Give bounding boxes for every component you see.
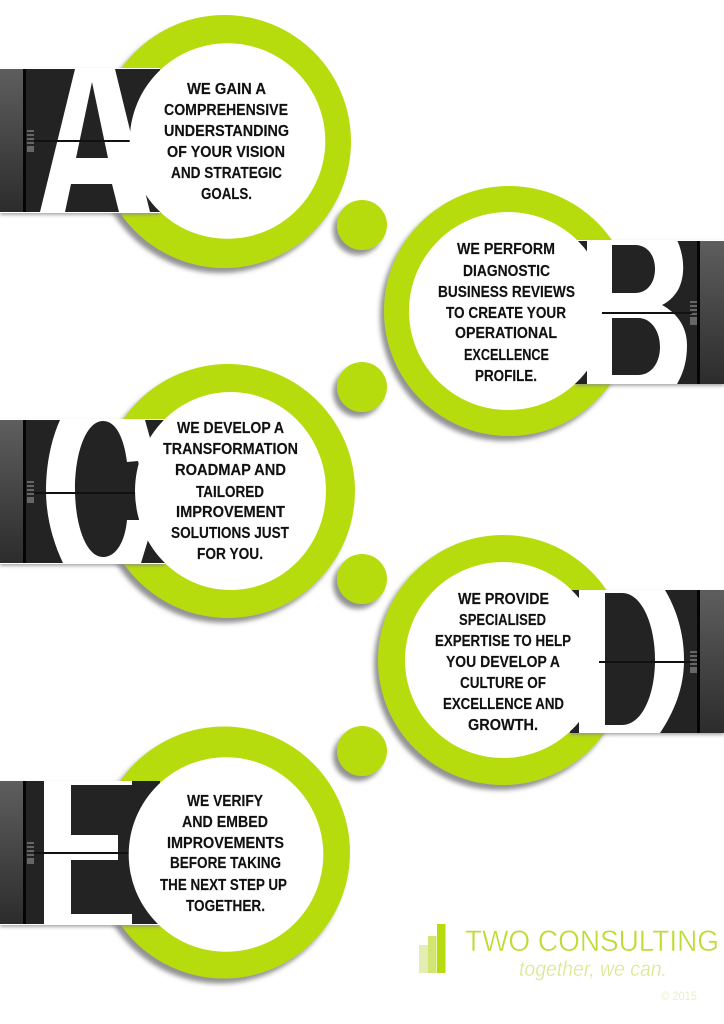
text D: WE PROVIDE [458, 591, 549, 608]
text C: ROADMAP AND [175, 462, 286, 479]
letter block D [570, 590, 724, 733]
text B: TO CREATE YOUR [446, 305, 566, 322]
connector dot 2 [337, 362, 387, 412]
panel: step E [0, 726, 350, 978]
inner circle B [409, 212, 607, 410]
ring C [101, 364, 355, 618]
text D: EXCELLENCE AND [443, 696, 564, 713]
text A: WE GAIN A [187, 81, 266, 98]
text B [438, 241, 575, 385]
logo: Two Consulting [419, 924, 719, 1003]
connector dot 1 [337, 200, 387, 250]
text C: FOR YOU. [197, 546, 263, 563]
text D: SPECIALISED [459, 612, 546, 629]
inner circle E [129, 757, 323, 952]
letter crossbar line B [602, 312, 692, 314]
inner circle D [405, 562, 601, 758]
text C: TAILORED [196, 484, 264, 501]
text D: CULTURE OF [460, 675, 546, 692]
text A: UNDERSTANDING [164, 123, 289, 140]
text E: AND EMBED [182, 814, 268, 831]
text A: COMPREHENSIVE [164, 102, 288, 119]
text B: WE PERFORM [457, 241, 555, 258]
text A [164, 81, 289, 203]
copyright: © 2015 [661, 991, 697, 1003]
letter block B [575, 240, 724, 384]
panel: step D [378, 535, 724, 785]
icon: bar chart logo [419, 924, 446, 973]
text E: THE NEXT STEP UP [160, 877, 287, 894]
text E: BEFORE TAKING [170, 855, 281, 872]
text D: YOU DEVELOP A [446, 654, 560, 671]
text C: IMPROVEMENT [176, 504, 285, 521]
text C [163, 420, 298, 563]
connector dot 3 [337, 554, 387, 604]
inner circle C [135, 392, 326, 590]
text B: BUSINESS REVIEWS [438, 284, 575, 301]
tagline: together, we can. [519, 958, 667, 981]
text E: TOGETHER. [186, 898, 265, 915]
text B: DIAGNOSTIC [463, 263, 550, 280]
panel: step B [384, 186, 724, 436]
text B: PROFILE. [475, 368, 537, 385]
text C: TRANSFORMATION [163, 441, 298, 458]
letter block A [0, 68, 160, 213]
panel: step C [0, 364, 355, 618]
text A: GOALS. [201, 186, 252, 203]
ring A [98, 15, 351, 268]
panel: step A [0, 15, 351, 268]
letter block E [0, 781, 160, 925]
letter block C [0, 419, 165, 564]
text E: IMPROVEMENTS [167, 835, 284, 852]
ring E [98, 726, 350, 978]
text D: GROWTH. [468, 717, 538, 734]
text C: SOLUTIONS JUST [171, 525, 289, 542]
text E: WE VERIFY [187, 793, 264, 810]
inner circle A [130, 43, 325, 239]
text D [435, 591, 571, 734]
text E [160, 793, 287, 915]
connector dot 4 [337, 726, 387, 776]
ring B [384, 186, 634, 436]
text B: OPERATIONAL [455, 325, 557, 342]
text A: AND STRATEGIC [171, 165, 282, 182]
text D: EXPERTISE TO HELP [435, 633, 571, 650]
letter crossbar line D [599, 661, 692, 663]
text B: EXCELLENCE [464, 347, 549, 364]
ring D [378, 535, 628, 785]
text C: WE DEVELOP A [177, 420, 284, 437]
text A: OF YOUR VISION [167, 144, 285, 161]
